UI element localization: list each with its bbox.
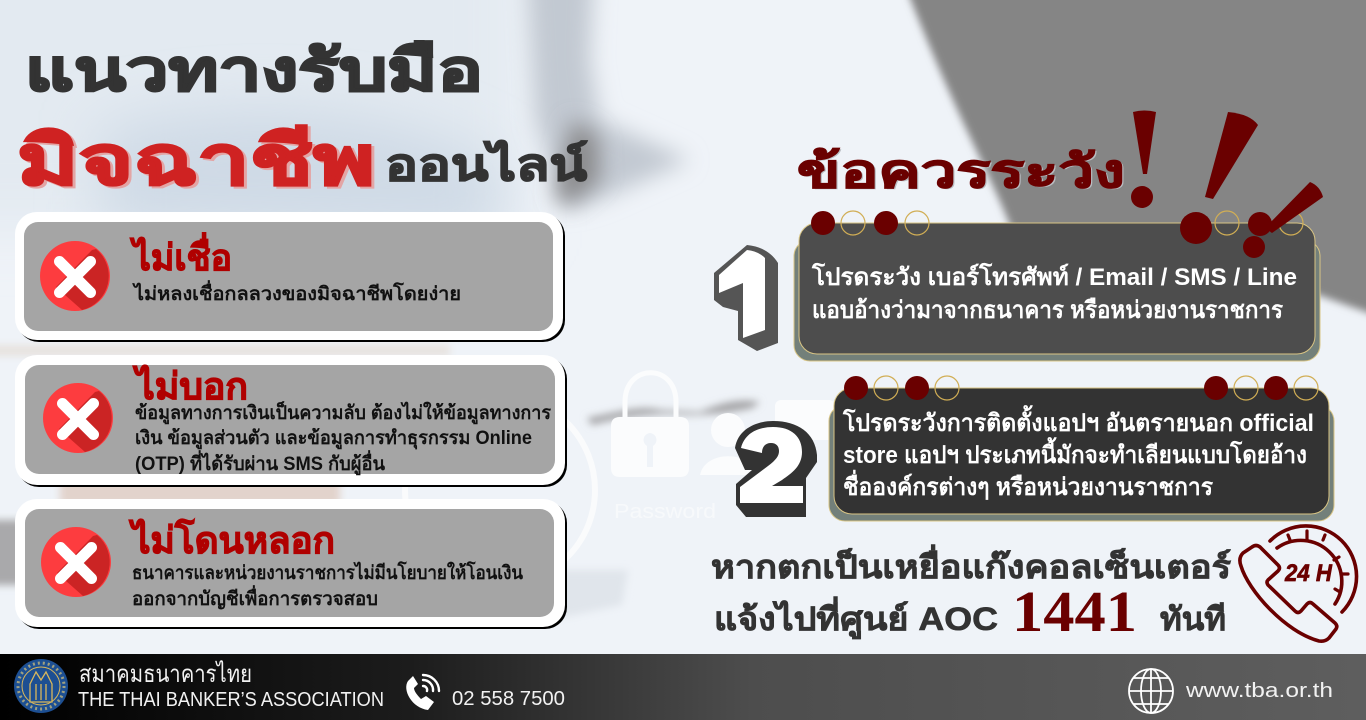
panel: warning one bbox=[794, 211, 1320, 361]
panel: warning two bbox=[829, 376, 1334, 521]
callout: call center: ทันที bbox=[1160, 601, 1226, 637]
body text: ธนาคารและหน่วยงานราชการไม่มีนโยบายให้โอนเงิน bbox=[132, 561, 523, 584]
organisation name: THE THAI BANKER’S ASSOCIATION bbox=[78, 689, 384, 711]
logo: Thai Bankers Association bbox=[14, 659, 68, 713]
body text bbox=[132, 561, 523, 610]
body text: เงิน ข้อมูลส่วนตัว และข้อมูลการทำธุรกรรม Online bbox=[135, 427, 532, 450]
icon: globe bbox=[1129, 669, 1173, 713]
body text bbox=[135, 400, 552, 476]
callout: call center: แจ้งไปที่ศูนย์ AOC bbox=[714, 596, 998, 640]
website: www.tba.or.th bbox=[1185, 680, 1333, 702]
decoration: binder rings bbox=[844, 376, 1318, 400]
icon: number two bbox=[735, 421, 817, 517]
body text bbox=[842, 404, 1314, 501]
icon: number one bbox=[714, 245, 778, 351]
title: line 2: มิจฉาชีพ bbox=[17, 123, 375, 199]
decoration: binder rings bbox=[811, 211, 1303, 235]
phone number: 02 558 7500 bbox=[452, 688, 565, 710]
panel: do not get scammed bbox=[15, 499, 567, 629]
footer bar bbox=[0, 654, 1366, 720]
organisation name bbox=[78, 660, 384, 711]
body text: ไม่หลงเชื่อกลลวงของมิจฉาชีพโดยง่าย bbox=[132, 280, 461, 305]
panel: do not believe bbox=[15, 212, 565, 342]
lock and password watermark bbox=[611, 373, 835, 523]
icon: red cross bbox=[43, 383, 113, 453]
body text: store แอปฯ ประเภทนี้มักจะทำเลียนแบบโดยอ้าง bbox=[843, 436, 1307, 469]
panel: do not tell bbox=[15, 355, 567, 487]
icon: exclamation marks bbox=[1131, 110, 1323, 258]
heading: precautions: ข้อควรระวัง bbox=[797, 145, 1125, 197]
heading: ไม่โดนหลอก bbox=[128, 518, 335, 561]
body text: โปรดระวัง เบอร์โทรศัพท์ / Email / SMS / Line bbox=[811, 262, 1297, 291]
heading: ไม่เชื่อ bbox=[129, 232, 232, 278]
body text: แอบอ้างว่ามาจากธนาคาร หรือหน่วยงานราชการ bbox=[812, 297, 1283, 324]
body text bbox=[811, 262, 1297, 324]
title: line 1: แนวทางรับมือ bbox=[25, 39, 483, 103]
body text: ข้อมูลทางการเงินเป็นความลับ ต้องไม่ให้ข้อมูลทางการ bbox=[135, 400, 552, 425]
title: line 2: มิจฉาชีพ bbox=[20, 125, 378, 201]
body text: ออกจากบัญชีเพื่อการตรวจสอบ bbox=[132, 585, 378, 610]
body text: ชื่อองค์กรต่างๆ หรือหน่วยงานราชการ bbox=[843, 469, 1213, 501]
title: line 2 bbox=[17, 123, 588, 201]
body text: (OTP) ที่ได้รับผ่าน SMS กับผู้อื่น bbox=[135, 450, 385, 476]
callout: call center: หากตกเป็นเหยื่อแก๊งคอลเซ็นเตอร์ bbox=[711, 544, 1231, 585]
callout: call center: 1441 bbox=[1012, 579, 1137, 644]
icon: phone bbox=[406, 675, 439, 710]
callout: call center bbox=[711, 544, 1231, 644]
heading: precautions: ข้อควรระวัง bbox=[799, 146, 1127, 198]
icon: red cross bbox=[40, 241, 110, 311]
icon: 24h phone bbox=[1240, 526, 1357, 641]
body text: โปรดระวังการติดตั้งแอปฯ อันตรายนอก official bbox=[842, 404, 1314, 437]
icon: red cross bbox=[41, 527, 111, 597]
lock and password watermark: Password bbox=[614, 501, 716, 523]
heading: ไม่บอก bbox=[132, 364, 248, 407]
organisation name: สมาคมธนาคารไทย bbox=[79, 660, 252, 688]
title: line 2: ออนไลน์ bbox=[385, 139, 588, 190]
icon: 24h phone: 24 H bbox=[1284, 560, 1333, 587]
